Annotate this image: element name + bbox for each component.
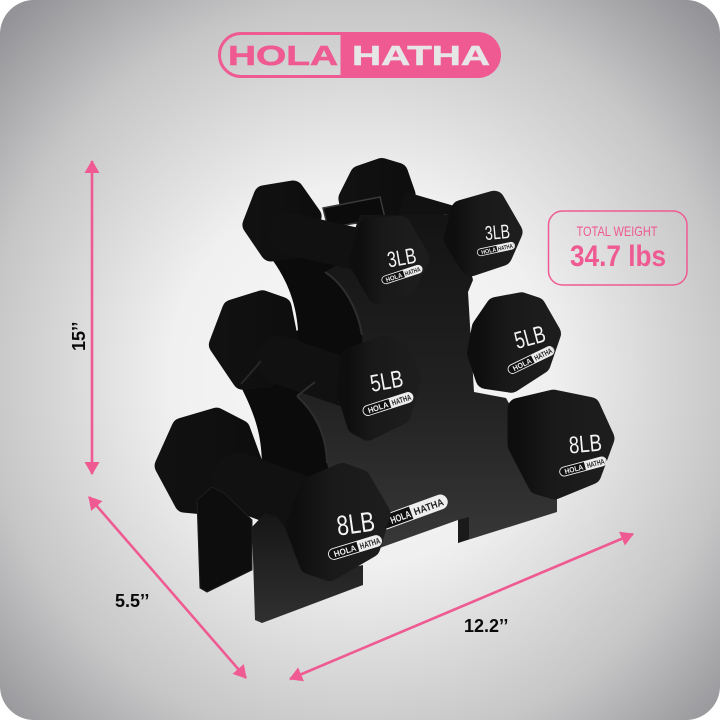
dumbbell: 3LB left: HATHA bbox=[404, 266, 422, 278]
dumbbell: 8LB right bbox=[518, 400, 607, 489]
rack: main panel bbox=[297, 215, 557, 554]
arrow: depth 5.5 inches bbox=[89, 497, 246, 678]
dumbbell: 3LB right: HOLA bbox=[481, 247, 497, 256]
rack logo bbox=[377, 493, 449, 531]
dumbbell: 8LB right: 8LB bbox=[568, 430, 603, 459]
dumbbell: 8LB right: HOLA bbox=[564, 462, 585, 476]
dumbbell: 3LB right bbox=[454, 201, 515, 266]
dumbbell: 8LB right: HATHA bbox=[586, 457, 606, 470]
arrow: width 12.2 inches bbox=[290, 534, 633, 679]
dumbbell: 5LB right bbox=[478, 303, 556, 382]
dumbbell rack and weights bbox=[165, 169, 607, 623]
dumbbell: 5LB right: 5LB bbox=[512, 321, 549, 355]
dumbbell: 5LB left bbox=[220, 301, 414, 430]
dumbbell: 5LB right: HATHA bbox=[533, 346, 554, 363]
callout: total weight bbox=[548, 211, 687, 285]
callout: total weight: TOTAL WEIGHT bbox=[576, 223, 658, 239]
arrow: height 15 inches: 15’’ bbox=[69, 322, 89, 351]
rack logo: HATHA bbox=[413, 497, 445, 518]
dumbbell: 3LB left bbox=[253, 191, 423, 293]
logo: HolaHatha: HOLA bbox=[228, 40, 338, 71]
dumbbell: 3LB left: HOLA bbox=[385, 272, 404, 284]
dumbbell: 5LB left: HOLA bbox=[367, 400, 390, 415]
arrow: width 12.2 inches: 12.2’’ bbox=[464, 616, 508, 636]
callout: total weight: 34.7 lbs bbox=[570, 240, 666, 273]
rack: top crossbars bbox=[323, 197, 446, 238]
rack: front foot bbox=[252, 513, 363, 623]
dumbbell: 8LB left: HOLA bbox=[333, 543, 358, 559]
rack: rear foot bbox=[197, 487, 252, 592]
dumbbell: 8LB left: HATHA bbox=[358, 535, 381, 551]
dumbbell: 3LB left: 3LB bbox=[385, 243, 418, 272]
dumbbell: 8LB left: 8LB bbox=[335, 506, 377, 542]
logo: HolaHatha: HATHA bbox=[352, 40, 490, 71]
logo: HolaHatha bbox=[219, 32, 501, 78]
dumbbell: rear top 3LB bbox=[349, 169, 462, 228]
dumbbell: 3LB right: HATHA bbox=[498, 244, 514, 253]
dumbbell: 3LB right: 3LB bbox=[484, 221, 511, 245]
arrow: depth 5.5 inches: 5.5’’ bbox=[115, 591, 149, 611]
dumbbell: 5LB left: HATHA bbox=[391, 393, 413, 408]
rack: rear plate bbox=[240, 240, 400, 490]
dumbbell: 5LB left: 5LB bbox=[368, 365, 405, 398]
dumbbell: 5LB right: HOLA bbox=[511, 356, 534, 373]
rack logo: HOLA bbox=[389, 509, 413, 527]
dumbbell: 8LB left bbox=[165, 418, 383, 623]
